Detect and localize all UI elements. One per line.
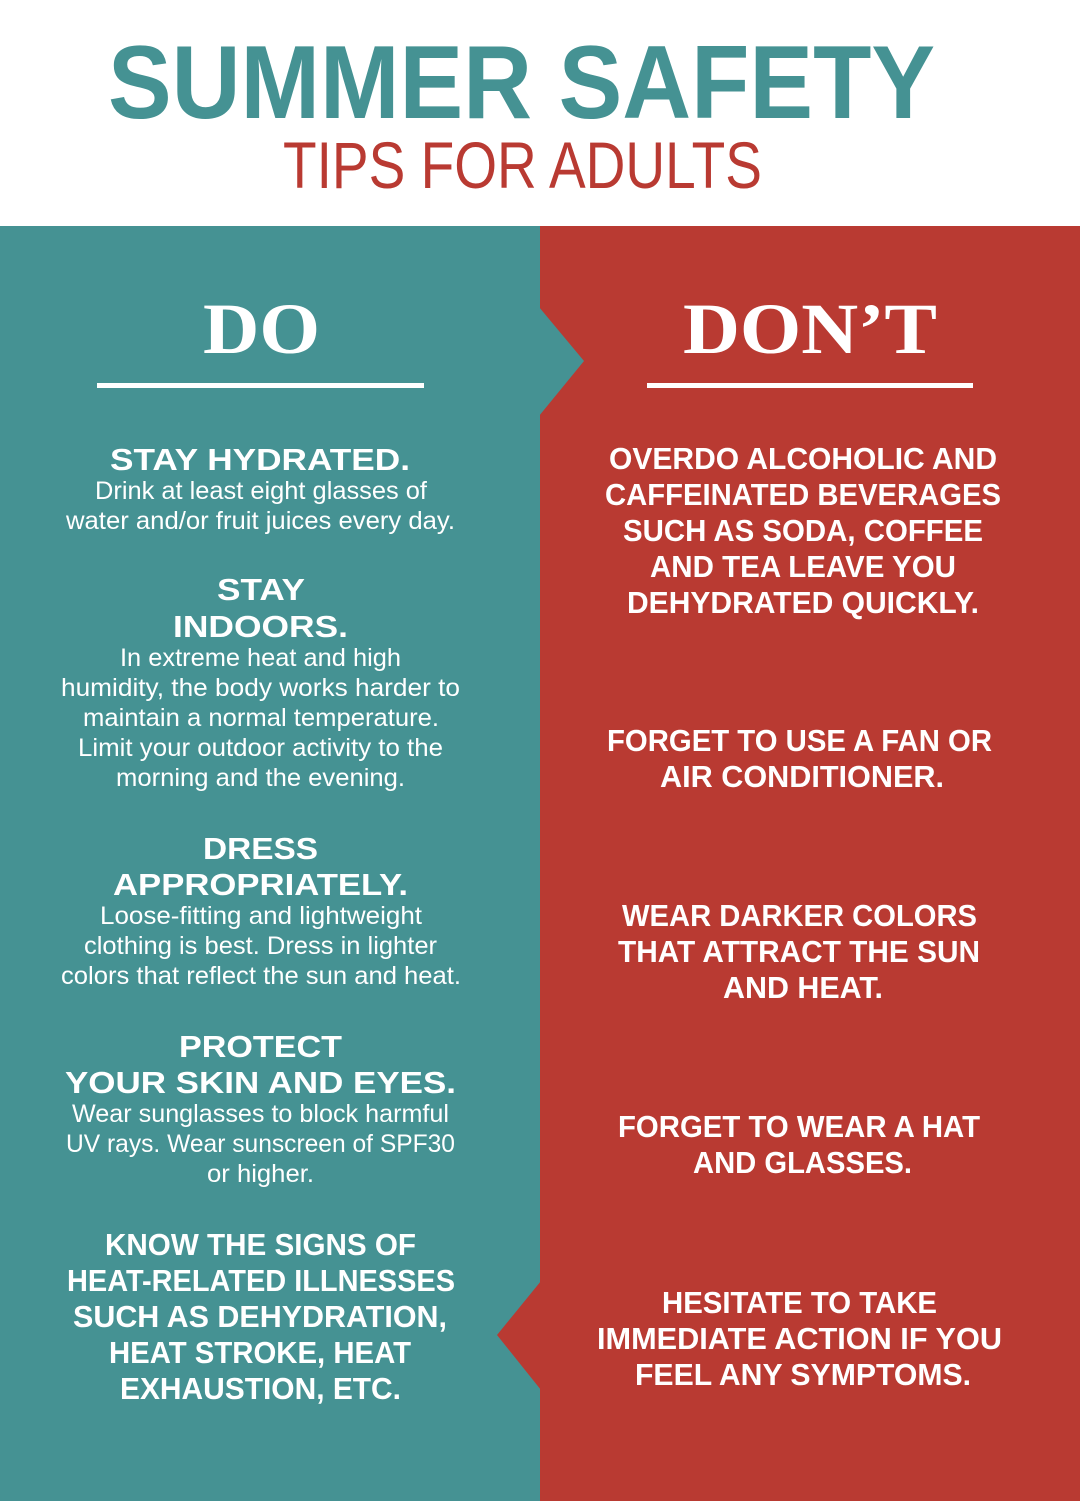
do tip: protect skin and eyes: YOUR SKIN AND EYES. xyxy=(65,1065,456,1100)
don't tip: alcohol and caffeine: OVERDO ALCOHOLIC AND xyxy=(609,441,997,476)
subtitle: TIPS FOR ADULTS xyxy=(283,128,762,202)
don't tip: darker colors: THAT ATTRACT THE SUN xyxy=(618,934,980,969)
header background xyxy=(0,0,1080,226)
do tip: know the signs: SUCH AS DEHYDRATION, xyxy=(73,1299,447,1334)
do tip: protect skin and eyes: PROTECT xyxy=(179,1029,342,1064)
arrow: red pointing left xyxy=(497,1281,541,1390)
don't tip: alcohol and caffeine: SUCH AS SODA, COFFEE xyxy=(623,513,983,548)
don't tip: hat and glasses xyxy=(618,1109,980,1180)
do tip: dress appropriately: Loose-fitting and lightweight xyxy=(100,902,422,930)
don't tip: alcohol and caffeine: DEHYDRATED QUICKLY. xyxy=(627,585,979,620)
heading: DO: DO xyxy=(203,289,320,369)
don't tip: hesitate: FEEL ANY SYMPTOMS. xyxy=(635,1357,971,1392)
title: SUMMER SAFETY xyxy=(108,25,935,141)
don't tip: hesitate: IMMEDIATE ACTION IF YOU xyxy=(597,1321,1002,1356)
heading: DO xyxy=(97,289,424,388)
don't tip: fan or AC: FORGET TO USE A FAN OR xyxy=(607,723,992,758)
don't tip: fan or AC xyxy=(607,723,992,794)
panel: do (teal) xyxy=(0,226,540,1501)
do tip: dress appropriately: APPROPRIATELY. xyxy=(113,867,408,902)
do tip: stay indoors: maintain a normal temperature. xyxy=(83,704,439,732)
do tip: protect skin and eyes: UV rays. Wear sunscreen of SPF30 xyxy=(66,1130,455,1158)
heading: DON'T: DON’T xyxy=(683,289,937,369)
do tip: stay hydrated: STAY HYDRATED. xyxy=(110,442,410,477)
do tip: know the signs: HEAT STROKE, HEAT xyxy=(109,1335,411,1370)
do tip: stay hydrated xyxy=(65,442,455,535)
do tip: stay indoors: In extreme heat and high xyxy=(120,644,401,672)
do tip: dress appropriately: DRESS xyxy=(203,831,318,866)
don't tip: fan or AC: AIR CONDITIONER. xyxy=(660,759,944,794)
do tip: stay indoors: STAY xyxy=(217,572,305,607)
do tip: stay hydrated: water and/or fruit juices every day. xyxy=(65,507,455,535)
do tip: know the signs: HEAT-RELATED ILLNESSES xyxy=(67,1263,455,1298)
panel: don't (red) xyxy=(540,226,1080,1501)
heading: DON'T xyxy=(647,289,973,388)
do tip: know the signs xyxy=(67,1227,455,1406)
do tip: know the signs: KNOW THE SIGNS OF xyxy=(105,1227,416,1262)
don't tip: hat and glasses: FORGET TO WEAR A HAT xyxy=(618,1109,980,1144)
do tip: stay hydrated: Drink at least eight glasses of xyxy=(95,477,427,505)
do tip: stay indoors xyxy=(61,572,460,792)
don't tip: alcohol and caffeine: AND TEA LEAVE YOU xyxy=(650,549,956,584)
don't tip: darker colors: WEAR DARKER COLORS xyxy=(622,898,977,933)
do tip: protect skin and eyes xyxy=(65,1029,456,1188)
arrow: teal pointing right xyxy=(539,307,584,416)
do tip: dress appropriately: clothing is best. Dress in lighter xyxy=(84,932,437,960)
do tip: protect skin and eyes: Wear sunglasses to block harmful xyxy=(72,1100,449,1128)
do tip: know the signs: EXHAUSTION, ETC. xyxy=(120,1371,401,1406)
do tip: stay indoors: INDOORS. xyxy=(173,609,348,644)
do tip: dress appropriately xyxy=(61,831,461,990)
do tip: protect skin and eyes: or higher. xyxy=(207,1160,314,1188)
don't tip: alcohol and caffeine: CAFFEINATED BEVERAGES xyxy=(605,477,1001,512)
don't tip: alcohol and caffeine xyxy=(605,441,1001,620)
do tip: stay indoors: Limit your outdoor activity to the xyxy=(78,734,443,762)
don't tip: hesitate: HESITATE TO TAKE xyxy=(662,1285,937,1320)
don't tip: hat and glasses: AND GLASSES. xyxy=(693,1145,912,1180)
don't tip: darker colors xyxy=(618,898,980,1005)
don't tip: hesitate xyxy=(597,1285,1002,1392)
do tip: stay indoors: morning and the evening. xyxy=(116,764,405,792)
don't tip: darker colors: AND HEAT. xyxy=(723,970,883,1005)
do tip: stay indoors: humidity, the body works harder to xyxy=(61,674,460,702)
do tip: dress appropriately: colors that reflect the sun and heat. xyxy=(61,962,461,990)
